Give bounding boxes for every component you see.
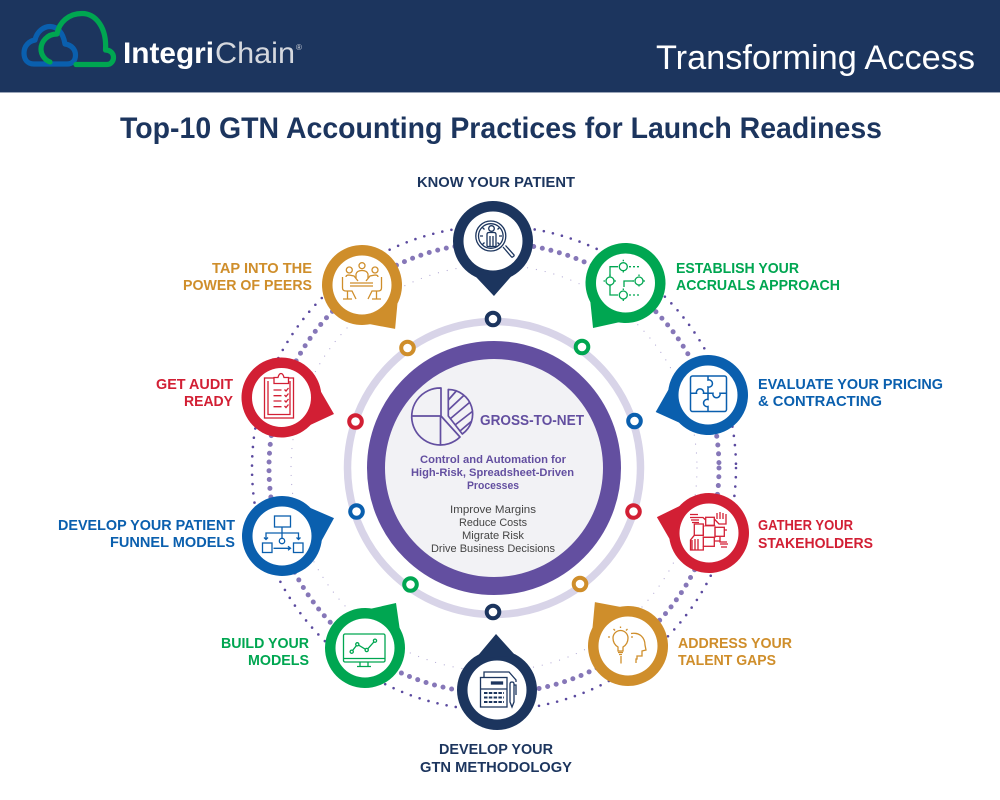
logo wordmark: ® [296,43,302,52]
label: develop your GTN methodology: GTN METHODOLOGY [420,759,572,776]
bubble: tap into the power of peers [306,229,427,353]
hub benefits list: Reduce Costs [459,517,527,529]
bubble: evaluate your pricing and contracting [643,345,758,450]
hub subheading [411,454,574,492]
bubble: develop your patient funnel models [231,480,347,587]
bubble: establish your accruals approach [561,227,681,351]
label: build your models [221,635,309,669]
logo wordmark: Integri [123,37,214,70]
hub benefits list: Improve Margins [450,504,537,516]
label: get audit ready [156,376,233,410]
label: tap into the power of peers: TAP INTO THE [212,260,312,277]
title: Top-10 GTN Accounting Practices for Launch Readiness [120,112,882,145]
icon: people at table [342,263,382,299]
label: know your patient: KNOW YOUR PATIENT [417,174,575,191]
icon: gear network [604,260,646,302]
label: gather your stakeholders: GATHER YOUR [758,517,853,534]
label: address your talent gaps: TALENT GAPS [678,652,776,669]
label: evaluate your pricing and contracting: EVALUATE YOUR PRICING [758,376,943,393]
label: gather your stakeholders: STAKEHOLDERS [758,535,873,552]
label: develop your GTN methodology [420,741,572,776]
hub subheading: Processes [467,480,519,492]
bubble: build your models [309,580,429,704]
logo wordmark [123,37,302,70]
connector nodes on hub ring [349,313,641,618]
icon: puzzle [690,376,726,412]
header banner [0,0,1000,93]
bubble: get audit ready [231,347,346,452]
icon: clipboard checklist [264,374,294,418]
label: evaluate your pricing and contracting [758,376,943,410]
label: establish your accruals approach [676,260,840,294]
label: build your models: BUILD YOUR [221,635,309,652]
label: develop your patient funnel models [58,517,235,551]
label: get audit ready: READY [184,393,233,410]
icon: flow chart [262,516,303,552]
icon: lightbulb and head [608,626,646,664]
label: develop your GTN methodology: DEVELOP YOUR [439,741,553,758]
icon: joined hands [690,512,728,550]
hub subheading: Control and Automation for [420,454,567,466]
logo: IntegriChain clouds [24,14,114,64]
dotted orbit rings [252,226,736,710]
hub heading: GROSS-TO-NET [480,413,584,429]
hub benefits list: Migrate Risk [462,530,525,542]
bubble: know your patient [452,200,534,297]
icon: magnifier with person [476,221,514,258]
label: establish your accruals approach: ESTABLISH YOUR [676,260,799,277]
label: establish your accruals approach: ACCRUALS APPROACH [676,277,840,294]
label: get audit ready: GET AUDIT [156,376,233,393]
icon: monitor with line chart [344,634,385,666]
label: tap into the power of peers [183,260,312,294]
central hub [348,322,640,614]
label: gather your stakeholders [758,517,873,552]
label: tap into the power of peers: POWER OF PEERS [183,277,312,294]
bubble: develop your GTN methodology [456,633,538,731]
logo wordmark: Chain [215,37,295,70]
icon: pie chart [412,388,473,445]
hub benefits list [431,504,555,555]
label: evaluate your pricing and contracting: & CONTRACTING [758,393,882,410]
bubble: gather your stakeholders [645,479,759,583]
label: address your talent gaps [678,635,792,669]
label: build your models: MODELS [248,652,309,669]
label: develop your patient funnel models: DEVELOP YOUR PATIENT [58,517,235,534]
banner tagline: Transforming Access [656,39,975,77]
label: address your talent gaps: ADDRESS YOUR [678,635,792,652]
hub benefits list: Drive Business Decisions [431,543,555,555]
label: develop your patient funnel models: FUNNEL MODELS [110,534,235,551]
icon: calculator, paper and pen [480,672,516,707]
hub subheading: High-Risk, Spreadsheet-Driven [411,467,574,479]
bubble: address your talent gaps [563,578,684,702]
